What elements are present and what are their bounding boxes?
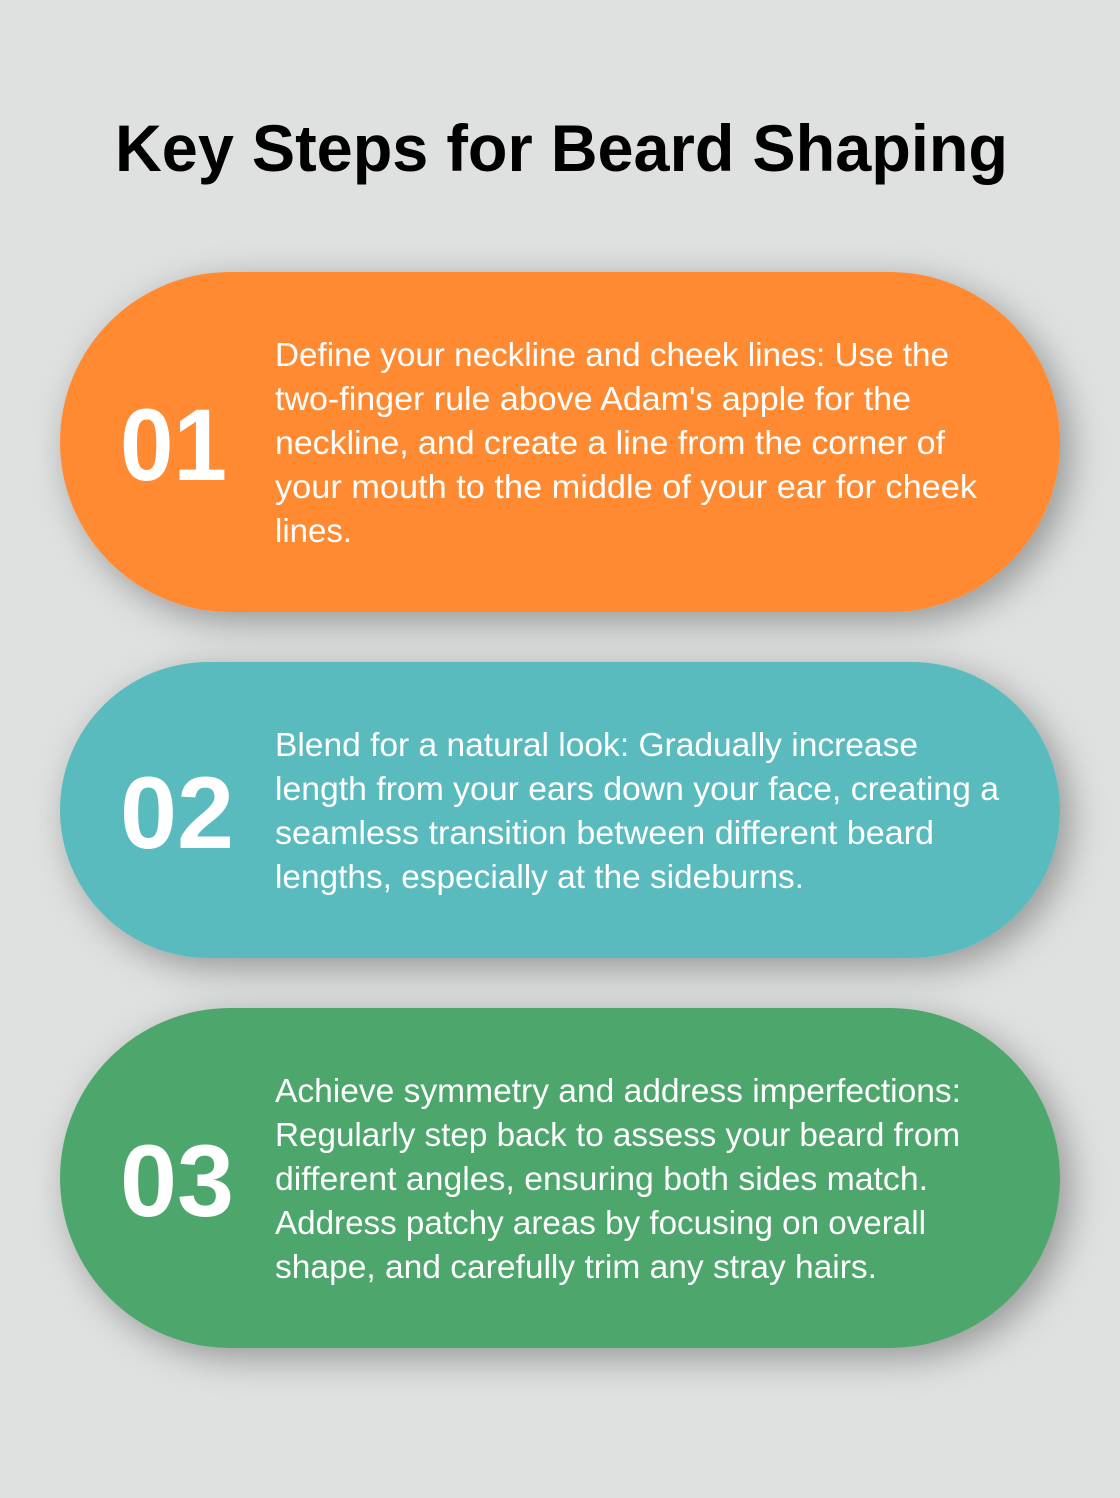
- text block: step 03: shape, and carefully trim any stray hairs.: [275, 1248, 877, 1285]
- text block: step 01: your mouth to the middle of your ear for cheek: [275, 468, 978, 505]
- text block: step 01: [275, 336, 978, 549]
- text block: step 03: different angles, ensuring both sides match.: [275, 1160, 928, 1197]
- number 02: 02: [120, 756, 234, 870]
- number 03: 03: [120, 1124, 234, 1238]
- text block: step 03: [275, 1072, 961, 1285]
- text block: step 02: length from your ears down your face, creating a: [275, 770, 1000, 807]
- panel: step 03: [60, 1008, 1060, 1348]
- pill background: step 02: [60, 662, 1060, 958]
- text block: step 02: lengths, especially at the sideburns.: [275, 858, 804, 895]
- text block: step 03: Achieve symmetry and address imperfections:: [275, 1072, 961, 1109]
- text block: step 03: Regularly step back to assess your beard from: [275, 1116, 960, 1153]
- text block: step 01: neckline, and create a line from the corner of: [275, 424, 946, 461]
- text block: step 02: [275, 726, 1000, 895]
- title: Key Steps for Beard Shaping: [115, 111, 1008, 185]
- pill background: step 03: [60, 1008, 1060, 1348]
- text block: step 01: lines.: [275, 512, 352, 549]
- number 01: 01: [120, 388, 227, 502]
- text block: step 01: Define your neckline and cheek lines: Use the: [275, 336, 949, 373]
- text block: step 01: two-finger rule above Adam's apple for the: [275, 380, 911, 417]
- text block: step 02: Blend for a natural look: Gradually increase: [275, 726, 918, 763]
- panel: step 01: [60, 272, 1060, 612]
- panel: step 02: [60, 662, 1060, 958]
- text block: step 03: Address patchy areas by focusing on overall: [275, 1204, 926, 1241]
- text block: step 02: seamless transition between different beard: [275, 814, 934, 851]
- pill background: step 01: [60, 272, 1060, 612]
